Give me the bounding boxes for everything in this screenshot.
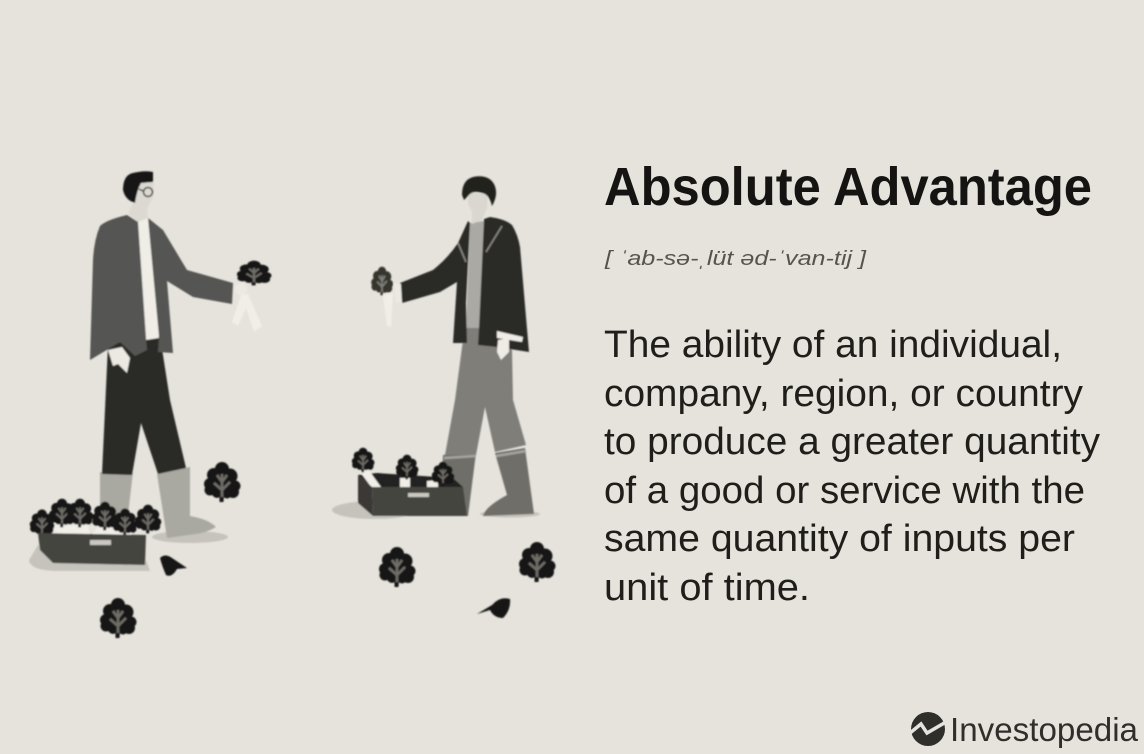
illustration: man with glasses, crate and greens — [29, 171, 272, 638]
hair — [123, 171, 153, 203]
definition text: of a good or service with the — [604, 470, 1085, 512]
title: Absolute Advantage — [604, 157, 1092, 217]
pronunciation: [ ˈab-sə-ˌlüt əd-ˈvan-tij ] — [604, 248, 867, 270]
definition text: The ability of an individual, — [604, 324, 1062, 366]
scattered greens, left — [100, 462, 240, 638]
jacket front and sleeve — [148, 218, 233, 353]
definition text — [604, 324, 1100, 609]
logo: Investopedia — [910, 711, 1139, 748]
head: face and neck — [128, 182, 154, 222]
front boot — [483, 448, 534, 516]
greens in hand — [232, 261, 272, 332]
definition text: to produce a greater quantity — [604, 421, 1100, 463]
jacket lapel lines — [458, 226, 502, 262]
ground shadows — [29, 531, 228, 571]
jacket — [90, 215, 147, 360]
illustration: man with open jacket, crate and greens — [332, 176, 556, 618]
jacket left panel and sleeve — [400, 221, 470, 343]
jacket right panel — [478, 217, 529, 352]
trousers — [445, 325, 526, 455]
definition text: company, region, or country — [604, 373, 1083, 415]
icon: logo mark — [910, 712, 946, 746]
scattered greens, right — [379, 542, 556, 618]
definition text: unit of time. — [604, 567, 810, 609]
shirt — [136, 217, 159, 340]
hand — [108, 347, 130, 373]
crate stems — [50, 515, 145, 535]
left boot — [100, 472, 133, 515]
crate — [38, 533, 146, 565]
ground shadows — [332, 501, 540, 519]
glasses — [139, 188, 152, 196]
crate greens — [30, 499, 161, 537]
right boot — [157, 467, 216, 538]
hair — [462, 176, 496, 206]
definition text: same quantity of inputs per — [604, 518, 1075, 560]
shirt — [466, 221, 484, 328]
head: face and neck — [468, 192, 488, 224]
crate — [352, 448, 467, 516]
trousers — [102, 336, 186, 475]
boot bands — [444, 451, 526, 458]
hand and cuff — [497, 331, 523, 360]
back boot — [440, 453, 476, 516]
greens in hand — [371, 267, 402, 327]
logo wordmark: Investopedia — [950, 711, 1139, 748]
